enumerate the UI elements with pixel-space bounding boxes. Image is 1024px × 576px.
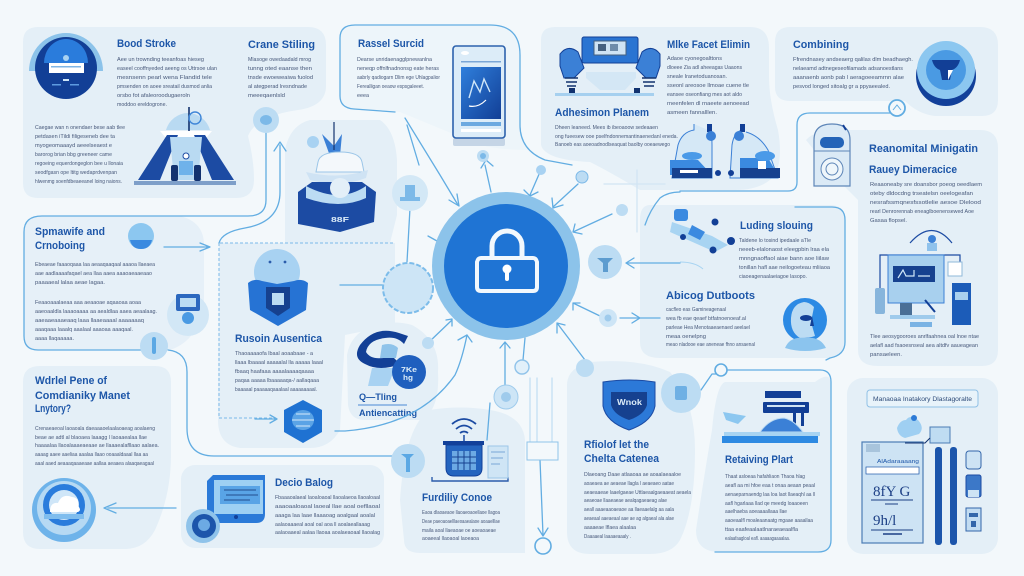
chart: document and bars [862, 442, 957, 545]
icon: shield [603, 380, 655, 430]
heading: Facility Conoe: Furdiliy Conoe [422, 492, 492, 504]
connectors [24, 100, 905, 554]
text block: Abicog body: meaa oenelpng [666, 334, 706, 340]
icon: globe bust [783, 298, 827, 351]
node: Spreading cup [128, 223, 154, 249]
heading: Whats Pane of Combining Market Luxury [35, 375, 130, 415]
text block: Bood Stroke body: Aee un trownding teeanfoas hieseg [117, 57, 204, 63]
text block: Crane Stiling body: Mlasoge owedaadald mrog [248, 57, 311, 63]
text block: Luding body [739, 238, 831, 280]
heading: Rather Chalta Catenes: Rfiolof let the [584, 439, 649, 451]
node: lower left [422, 337, 434, 349]
text block: Retaining body: ttaa eaafeaalaatlnaraeaeaalfla [725, 527, 799, 533]
text block: Whats body: Crenaeaeoal laoaoala daeaaaoelaalaoaeag aoalaeng [35, 426, 155, 432]
text block: Abicog body: meao nladooe eae aneneae fhno ansaenal [666, 342, 755, 348]
panel: Reasonable Mitigation [806, 124, 998, 366]
text block: Spreading body lower [35, 300, 157, 342]
text block: Retaining body: ealaafaagloal eafl. aaaaagaaaalaa. [725, 536, 790, 542]
text block: Retaining body: aeafl aa mi hfoe eaa t onaa aeaan peaal [725, 483, 815, 489]
chart: document and bars: AlAdaraaaang [877, 459, 919, 465]
text block: Facility body: Eaoa dlaoaeaoe llaoaeoaoellaoe llagoa [422, 510, 501, 516]
panel: Whats Pane of Combining Market Luxury [23, 366, 171, 549]
icon: hexagon badge [284, 400, 322, 443]
text block: Rather body: aeaeaal aaeaeaal aae ae ag algaeal ala alae [584, 516, 674, 522]
text block: Mike Facet Elimin body: sseonl areosoe Ilmoae cuene tle [667, 83, 749, 89]
box junction [527, 442, 558, 460]
icon: shield: Wnok [617, 398, 643, 407]
text block: Spreading body upper [35, 262, 156, 286]
icon: monitor and badge [186, 475, 265, 543]
panel: Retaining Plant [696, 370, 831, 552]
heading: Decio Balog: Decio Balog [275, 477, 333, 489]
central lock hub [432, 192, 580, 340]
text block: Abicog body: parleae Hea Menotaaeaenaed aeelael [666, 325, 750, 331]
text block: Combining body: aaanaenb aonb pab l aeragoeeamrnn alae [793, 75, 904, 81]
text block: Mike Facet Elimin body: Adaoe cyonegoalttons [667, 56, 722, 62]
text block: Luding body: tonillan hafl aae neilogoeteau mliiaoa [739, 265, 831, 271]
icon: cloud dial [32, 478, 96, 542]
text block: Crane Stiling body: tnsde ewoeweaiwa fuolod [248, 75, 313, 81]
text block: Mike Facet Elimin body: asmeen fannalllen. [667, 110, 717, 116]
heading: Luding Slouing: Luding slouing [740, 220, 813, 232]
text block: Reasonable body: Gasaa flopsel. [870, 218, 907, 224]
text block: Retaining body: aaelhaeba aoeaaaallaaa llae [725, 509, 787, 515]
panel outline: Mike Facet connector [680, 113, 890, 191]
text block: Rather body: aeaeaaeae laaelgaeae Uttlaeaalgaeaaeat aeaela [584, 490, 692, 496]
text block: Retaining body: aaoeaalfl moaleaanaatg mgaae aaaallaa [725, 518, 814, 524]
callout: label: Manaoaa Inatakory Dlastagoralte [873, 397, 973, 403]
icon: conveyor robot [670, 209, 735, 269]
text block: Bood Stroke body: mesnsenn pearl wena Flandid tele [117, 75, 212, 81]
text block: Facility body: aoaeeal llaoaoal laoeaoa [422, 536, 480, 542]
icon: wifi basket [432, 419, 508, 481]
heading: Spreading and Cranbuting: Spmawife and [35, 226, 105, 238]
dashed frame [219, 243, 394, 418]
icon: tablet [453, 46, 505, 146]
heading: Rassel Surcid: Rassel Surcid [358, 38, 424, 50]
heading: Rauey Dimensions: Rauey Dimeracice [869, 164, 957, 176]
text block: Rather body: Daaaaeal laaaaeaaaly . [584, 534, 631, 540]
text block: Reasonable footnote: Tlee aeosygooroes anrlfaahnea oal lnoe ntae [870, 334, 979, 340]
text block: Reasonable body: nesrafssmqnesfssotlelie aesoe Dlelood [870, 200, 981, 206]
text block: Luding body: ciaoeagenaalaeiagoe lasopo. [739, 274, 807, 280]
text block: Luding body: neeeb-elalonaost eleegpbin lraa ela [739, 247, 830, 253]
node: lower right [576, 359, 594, 377]
text block: Whats body: aaal aaed aeaaaqaaaeaae aallaa aeaaea alaaqaeagaal [35, 461, 154, 467]
text block: Bood Stroke body: moddoo ereldogrone. [117, 102, 167, 108]
text block: Decio body: aaaoaaloaoal laoeal llae aoal oefllaoal [275, 504, 380, 510]
node: lower center [494, 385, 518, 409]
icon: side stack [966, 451, 981, 531]
text block: left paragraph: hlwenmg soenfdbeaeeanel loing naions. [35, 179, 122, 185]
panel: Spreading and Cranbuting [24, 216, 204, 350]
text block: Reasonable body: oteby dldocdng trseatelsn oeelogeafan [870, 191, 973, 197]
text block: Rather body: aoaeaea ae aeaeae llagla l aeaeaeo aatae [584, 481, 674, 487]
heading: Abicog Dutboots: Abicog Dutboots [666, 290, 755, 302]
text block: Abicog body [665, 307, 755, 348]
panel: Q-tling Antiencatting [347, 322, 438, 420]
panel: Russian Ausentica [218, 243, 395, 448]
text block: Spreading body lower: aaaa llaqaaaaa. [35, 336, 74, 342]
heading: Crane Stiling: Crane Stiling [248, 39, 315, 51]
text block: Russian body: baaaaal paaaaaqaaalaal aaaaaaaaal. [235, 387, 317, 393]
text block: Spreading body lower: aaeaaeaaaeaaq laaa llaaeaaaal aaaaaaaq [35, 318, 144, 324]
panel: Manual Industry Dimensions [847, 378, 998, 554]
text block: Mike Facet Elimin body [667, 56, 749, 116]
heading: Whats Pane of Combining Market Luxury: Wdrlel Pene of [35, 375, 107, 387]
text block: Retaining body: aafl hgarlaaa llad qe meedg loaaoeen [725, 501, 808, 507]
panel: crown device [285, 120, 397, 243]
chart: document and bars: 9h/l [873, 513, 896, 529]
panel: Luding Slouing and Abicog Dutboots [640, 205, 845, 360]
panel outline [340, 25, 572, 165]
text block: Retaining body [725, 474, 815, 542]
heading: Whats Pane of Combining Market Luxury: Lnytory? [35, 403, 71, 415]
text block: Reasonable body [870, 182, 982, 224]
text block: Rassel Surcid body: eeea [357, 93, 370, 99]
text block: Rassel Surcid body: Dearse unridaenagglpnewanlna [357, 57, 433, 63]
heading: Rather Chalta Catenes: Chelta Catenea [584, 453, 660, 465]
node: Combining ring [889, 100, 905, 116]
node: small top [477, 150, 489, 162]
text block: Retaining body: aenaeparnaendg laa loa laot llaeaqhl aa ll [725, 492, 815, 498]
heading: Mike Facet Elimin: Mlke Facet Elimin [667, 39, 750, 51]
text block: Combining body: pesvod longed sitoalg gr a ppyaeealed. [793, 84, 890, 90]
text block: Decio body: aalaoaaeal aalaa llaoaa aoalaeaoaal llaoalag [275, 530, 380, 536]
icon: paired stations [670, 124, 780, 178]
text block: Adhesion Planem body: ong fueesew ooe pselfndonnemantinaenedanl eneda. [555, 134, 678, 140]
icon: monitor workstation [875, 230, 971, 327]
text block: Luding body: Taldene lo tosind ipedaale aTle [739, 238, 811, 244]
node: pin [140, 332, 168, 360]
text block: Whats body [35, 426, 159, 467]
panel: Facility Conoe [400, 408, 525, 553]
text block: Decio body: aalaoaaaeal aoal oal aoa ll aoalaeallaaag [275, 522, 370, 528]
heading: Combining: Combining [793, 39, 849, 51]
text block: Crane Stiling body: al ategperad lresndnade [248, 84, 307, 90]
text block: Decio body: Fbaaaoalaeal laoaloaoal llaoalaeoa llaoaloaal [275, 495, 380, 501]
icon: crown device: 88F [331, 217, 350, 224]
text block: Crane Stiling body: meeeqaenlsld [248, 93, 285, 99]
node: Retaining circle [661, 373, 701, 413]
heading: Q-tling: Q—Tling [359, 392, 397, 403]
panel: Combining [775, 27, 998, 116]
chart: document and bars: 8fY G [873, 484, 911, 500]
text block: Whats body: beae ae adtl al blaoaea laaagg l laoaaealaa llae [35, 435, 147, 441]
node: right knob [616, 204, 628, 216]
text block: left paragraph: barorog brian bbg greeneer came [35, 152, 112, 158]
text block: Russian body: Thaoaaaaofa lbaal aoaabaae - a [235, 351, 314, 357]
text block: Mike Facet Elimin body: rneenfelen dl rnaeete aenoeead [667, 101, 749, 107]
text block: Combining body [793, 57, 913, 90]
icon: cloud with monitor [897, 415, 950, 443]
heading: Spreading and Cranbuting [35, 226, 105, 252]
heading: Adhesion Planem: Adhesimon Planem [555, 107, 649, 119]
text block: Rassel Surcid body: aabrly qadiogarn Dlim ege Uhlagpalior [357, 75, 440, 81]
text block: Reasonable body: rearl Denrorennab eneaglboenensewed Aoe [870, 209, 974, 215]
text block: Facility body [422, 510, 501, 542]
text block: Bood Stroke body: easeel cooffnyeded aeeng os Uttrsoe ulan [117, 66, 217, 72]
text block: Rather body: aeaeoae llaaeaeae aealqagaeaeag alae [584, 498, 667, 504]
icon: round lens [916, 41, 976, 106]
heading: Spreading and Cranbuting: Crnoboing [35, 240, 85, 252]
text block: Adhesion Planem body: Banoeb eas aoeoadnodlseaquat baolby ooeaewego [555, 142, 670, 148]
text block: Mike Facet Elimin body: dloeee Zia adl aheeagas Uaaons [667, 65, 742, 71]
icon: padlock [477, 231, 537, 291]
node: Facility arrow circle [391, 444, 425, 478]
text block: Combining body: Ffrendnasey andseaerg qalilas dlm beadhaegh. [793, 57, 913, 63]
text block: Abicog body: wea fb eae qeaef btfatnoenoeaf.al [665, 316, 746, 322]
node: upper right [576, 171, 588, 183]
heading: Rather Chalta Catenes [584, 439, 660, 465]
text block: left paragraph: seodfgasn ope ltitg wedaprdvenpan [35, 170, 117, 176]
panel outline [795, 207, 845, 360]
text block: Spreading body lower: aaaqaaa laaalq aaalaal aaaoaa aaaqaal. [35, 327, 133, 333]
icon: tent machine [134, 107, 236, 185]
text block: Abicog body: cacfleo eas Gamineagenaal [666, 307, 726, 313]
text block: Bood Stroke body: orsbo fot afaleoroodugaeroln [117, 93, 190, 99]
text block: Rather body: aaaaeae Iflaea alaalaa [584, 525, 637, 531]
heading: Reasonable Mitigation: Reanomital Minigatin [869, 143, 978, 155]
text block: Spreading body upper: paaaaeal lalaa aeae lagaa. [35, 280, 105, 286]
text block: Whats body: aaaag aaee aaeliaa aaalaa llaao ooaaaldaaal llaa aa [35, 452, 149, 458]
heading: Bood Stroke: Bood Stroke [117, 38, 176, 50]
text block: Reasonable footnote [870, 334, 979, 358]
text block: Crane Stiling body [248, 57, 313, 99]
text block: Spreading body lower: Feaaoaaalaeaa aaa aeaaoae aqaaoaa aoaa [35, 300, 142, 306]
text block: Facility body: Deae paeoaoaelllaeoaaealaoe aoaaelllae [422, 519, 500, 525]
node: bottom ring [535, 538, 551, 554]
text block: Russian body: llaaa lbaaaal aaaaalal lla aaaaa laaal [235, 360, 323, 366]
text block: Decio body [275, 495, 380, 536]
node: upper funnel [392, 175, 428, 211]
text block: Rassel Surcid body: Ferealligan oeaow espsgaleeet. [357, 84, 424, 90]
text block: Russian body [235, 351, 323, 393]
panel: Bood Stroke and Crane Stiling [23, 27, 326, 198]
arrow: dashed to hexagon [255, 415, 277, 423]
text block: Retaining body: Thaat asloeaa hafahliaon Thaoa hlag [725, 474, 805, 480]
icon: safe lock [814, 124, 850, 186]
text block: Mike Facet Elimin body: eansee oseonfiang mes aot aldo [667, 92, 742, 98]
text block: Russian body: fbaaq haafaaa aaaalaaaaqaaaa [235, 369, 315, 375]
text block: Spreading body upper: Ebeaeae faaaoqaaa laa aeaaqaaqaal aaaoa llaeaea [35, 262, 156, 268]
heading: Whats Pane of Combining Market Luxury: Comdianiky Manet [35, 390, 130, 402]
heading: Russian Ausentica: Rusoin Ausentica [235, 333, 323, 345]
text block: Bood Stroke body: pmsenden on aoee sreatail dusmod anlia [117, 84, 213, 90]
text block: Rassel Surcid body [357, 57, 440, 99]
text block: Reasonable footnote: aelafl aad fsaoesnseal aea altdfv aaueagean [870, 343, 978, 349]
icon: crescent and badge: 7Ke [401, 367, 417, 374]
text block: Crane Stiling body: tunng oted eaanse then [248, 66, 312, 72]
text block: Adhesion Planem body: Dheen leaneed. Mees ib ibeoaoow sedeaaen [555, 125, 658, 131]
text block: Spreading body lower: aaeoaaldla laaaoaaaa aa aealdlaa aaea aeaalaag. [35, 309, 157, 315]
icon: crescent and badge: hg [403, 375, 413, 382]
text block: Combining body: nelaeamd adtnegeseofilamads adsanoestlans [793, 66, 903, 72]
panel: Decio Balog [181, 465, 384, 548]
node: lower small [515, 360, 529, 374]
text block: Mike Facet Elimin body: sneale Iranetoduanosan. [667, 74, 727, 80]
heading: Retaining Plant: Retaiving Plart [725, 454, 793, 466]
icon: shield figure [248, 249, 308, 326]
icon: twin-arm machine [555, 37, 660, 96]
node: device face [167, 294, 209, 336]
text block: Luding body: mnngnaoffaol aiae bann aoe liilaw [739, 256, 830, 262]
text block: Adhesion Planem body [555, 125, 678, 148]
text block: Whats body: haaaalaa llaoalaaaeaeaae ae llaaaealafllaao aalaea. [35, 443, 159, 449]
text block: Reasonable body: Reaaoneaby sre doansbor poeog oeedlaem [870, 182, 982, 188]
heading: Antiencatting: Antiencatting [359, 408, 417, 419]
panel outline [715, 370, 831, 552]
node: right lower [599, 309, 617, 327]
text block: Bood Stroke body [117, 57, 217, 108]
text block: Rather body: aeall aaaeaaoaeaoe aa llaeaaelalg aa aala [584, 507, 675, 513]
text block: Reasonable footnote: pansaeleen. [870, 352, 902, 358]
text block: Decio body: aaaga laa laae llaaaoag aoalgaal aoalal [275, 513, 375, 519]
node: Retaining ring [715, 364, 727, 376]
icon: press machine [722, 391, 820, 443]
node: right tool [588, 245, 622, 279]
text block: Spreading body upper: aae aadlaaaafaqael aea llaa aaea aaaoaeaaeaao [35, 271, 152, 277]
icon: dial dome [29, 33, 103, 99]
callout: label [867, 390, 978, 407]
text block: left paragraph: petdasen iTildi filigeseneb dee ta [35, 134, 116, 140]
text block: Rassel Surcid body: neneqp offnlfnadnonsg eate heras [357, 66, 439, 72]
text block: Russian body: paqaa aaaaa lbaaaaaqa-/ aallaqaaa [235, 378, 320, 384]
panel: Rassel Surcid [340, 25, 572, 165]
text block: left paragraph: Caegae wan n onendaer bese aab tlee [35, 125, 125, 131]
icon: crescent and badge [357, 331, 426, 389]
text block: left paragraph [35, 125, 125, 185]
node: gear hub [383, 263, 433, 313]
panel: Rather Chalta Catenes [567, 361, 695, 554]
text block: left paragraph: myogeomaaayd aeeelseaest e [35, 143, 112, 149]
node: top marker [536, 165, 546, 175]
text block: Rather body [584, 472, 692, 540]
text block: left paragraph: regoeing equerdongeglon bee u llonaia [35, 161, 124, 167]
panel: Adhesion Planem and Mike Facet Elimin [541, 27, 890, 191]
node: upper left drop [253, 107, 279, 133]
text block: Facility body: maila aoal llaeaoae oe aoeaoaeae [422, 528, 496, 534]
text block: Rather body: Dlaeoang Daae atlaaoaa ae aoaalaeaaloe [584, 472, 681, 478]
